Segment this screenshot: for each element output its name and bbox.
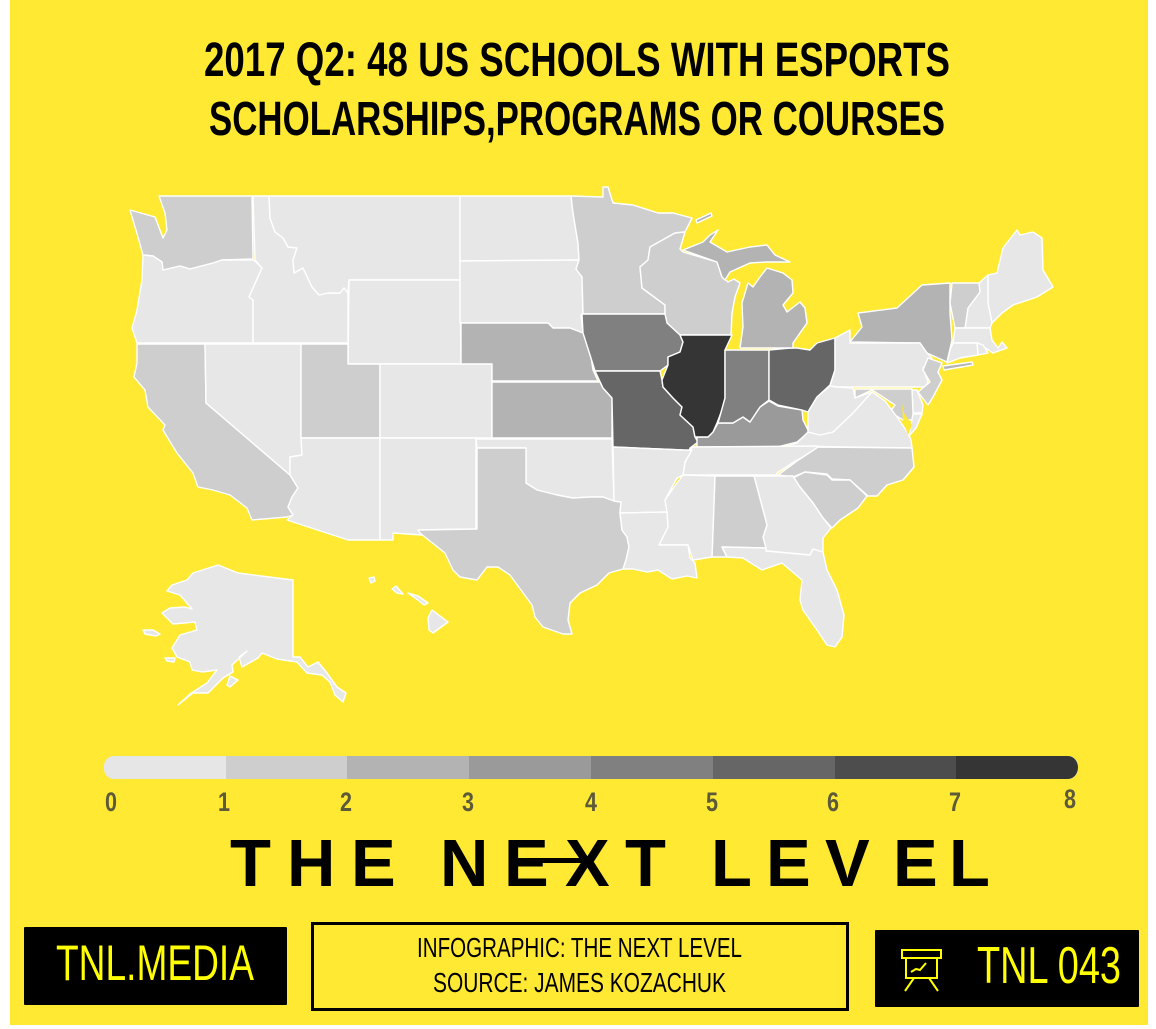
state: Tennessee xyxy=(683,446,818,475)
logo: The Next Level: THE NEXT LEVEL xyxy=(230,826,990,901)
state: North Carolina xyxy=(778,447,914,496)
badge: TNL 043 xyxy=(875,930,1139,1007)
state: Delaware xyxy=(912,390,923,413)
state: Washington xyxy=(130,196,253,270)
state: California xyxy=(134,344,298,520)
state: South Carolina xyxy=(793,472,867,528)
state: Connecticut xyxy=(947,343,978,363)
state: Maine xyxy=(988,230,1053,323)
state: Ohio xyxy=(769,338,835,412)
state: Louisiana xyxy=(620,512,697,579)
state: Massachusetts xyxy=(953,328,1007,353)
state: Virginia xyxy=(787,392,912,448)
legend tick labels: 2 xyxy=(340,787,352,817)
state: Maryland xyxy=(855,389,922,420)
state: Michigan upper peninsula xyxy=(683,230,790,280)
legend tick labels: 3 xyxy=(462,787,474,817)
state: Wyoming xyxy=(348,280,461,364)
state: New York xyxy=(850,283,952,362)
credits box xyxy=(312,924,848,1010)
state: Minnesota xyxy=(571,187,692,314)
state: Oregon xyxy=(132,255,262,343)
state: Mississippi xyxy=(659,475,715,560)
state: New York Long Island xyxy=(943,362,973,370)
water: Chesapeake Bay xyxy=(902,403,912,435)
state: Hawaii Maui xyxy=(408,593,428,605)
state: Alaska St. Lawrence Island xyxy=(143,630,160,636)
title: 2017 Q2: 48 US SCHOOLS WITH ESPORTS xyxy=(204,34,950,87)
state: Nevada xyxy=(205,344,302,475)
state: Oklahoma xyxy=(476,439,614,501)
state: Arizona xyxy=(287,438,380,540)
icon: presentation board xyxy=(902,950,941,991)
choropleth map of US states xyxy=(130,187,1053,705)
badge: TNL.MEDIA: TNL.MEDIA xyxy=(56,935,254,991)
credits box: INFOGRAPHIC: THE NEXT LEVEL xyxy=(417,932,742,963)
state: Utah xyxy=(301,344,380,438)
state: Hawaii Big Island xyxy=(428,610,448,633)
state: Georgia xyxy=(754,476,831,555)
badge: TNL.MEDIA xyxy=(24,927,287,1005)
state: Michigan Isle Royale xyxy=(696,213,712,223)
state: Kansas xyxy=(492,382,612,438)
legend tick labels: 6 xyxy=(827,787,839,817)
legend tick labels: 7 xyxy=(949,787,961,817)
state: Florida xyxy=(722,547,844,647)
state: New Mexico xyxy=(380,438,476,540)
state: Rhode Island xyxy=(977,343,988,355)
state: Indiana xyxy=(718,350,769,423)
state: New Jersey xyxy=(918,358,942,405)
state: Texas xyxy=(418,448,629,634)
state: Idaho xyxy=(249,196,348,343)
state: Colorado xyxy=(380,364,492,438)
state: North Dakota xyxy=(460,196,579,261)
state: Michigan lower peninsula xyxy=(740,268,807,348)
state: Pennsylvania xyxy=(830,330,932,387)
state: Wisconsin xyxy=(640,232,740,335)
legend tick labels: 1 xyxy=(218,787,230,817)
state: Alabama xyxy=(712,476,767,557)
state: Alaska Kodiak Island xyxy=(227,676,238,687)
title xyxy=(204,34,950,146)
legend colour scale xyxy=(104,756,1078,817)
state: Montana xyxy=(269,196,460,295)
legend bar xyxy=(104,756,1078,779)
legend tick labels xyxy=(105,784,1076,817)
state: Hawaii Oahu xyxy=(392,586,403,594)
legend tick labels: 4 xyxy=(585,787,597,817)
state: Illinois xyxy=(662,335,732,437)
state: Nebraska xyxy=(461,323,598,381)
legend tick labels: 5 xyxy=(706,787,718,817)
state: New Hampshire xyxy=(965,275,992,328)
state: Kentucky xyxy=(697,401,809,447)
icon: logo arrow xyxy=(516,858,592,863)
state: Vermont xyxy=(950,283,980,328)
state: Arkansas xyxy=(613,447,692,513)
state: Hawaii Kauai xyxy=(369,577,375,583)
credits box: SOURCE: JAMES KOZACHUK xyxy=(433,967,726,998)
state: Iowa xyxy=(582,314,683,371)
state: West Virginia xyxy=(808,386,872,435)
legend tick labels: 0 xyxy=(105,787,117,817)
state: Virginia eastern shore xyxy=(909,414,922,436)
state: Alaska xyxy=(162,565,346,705)
legend tick labels: 8 xyxy=(1064,784,1076,814)
state: South Dakota xyxy=(460,260,583,333)
state: Missouri xyxy=(595,371,698,456)
state: Alaska Nunivak Island xyxy=(165,658,175,662)
